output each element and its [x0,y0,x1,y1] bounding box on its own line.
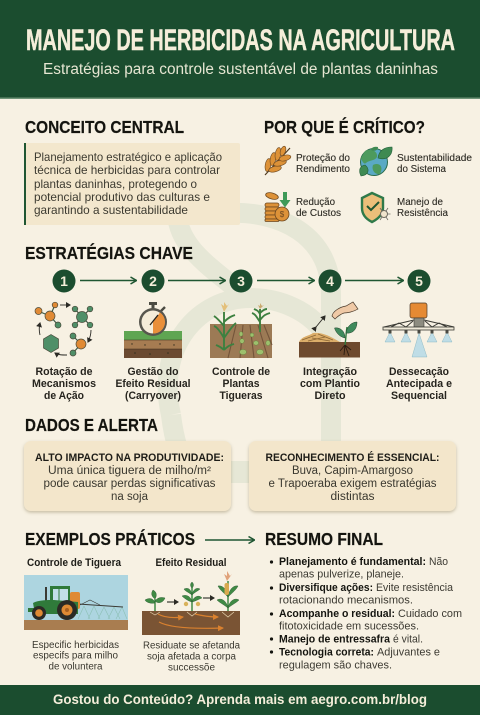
card: alto impacto: Uma única tiguera de milho/m² [48,465,211,477]
illustration: tractor spraying [24,575,128,630]
card: reconhecimento: RECONHECIMENTO É ESSENCIAL: [266,451,440,464]
panel: conceito central: técnica de herbicidas para controlar [34,163,220,177]
subtitle: Estratégias para controle sustentável de plantas daninhas [43,61,438,78]
caption: efeito residual: Residuate se afetanda [143,640,240,652]
caption: efeito residual: soja afetada a corpa [147,652,236,662]
illustration: residual effect succession [142,571,240,635]
arrow 1 to 2 [80,280,136,282]
label: manejo de resistência [397,197,448,219]
step 2 badge: 2 [149,273,157,289]
label: sustentabilidade do sistema [397,153,472,175]
label: controle de plantas tigueras: Tigueras [220,390,262,402]
step 4 badge [318,270,342,292]
label: manejo de resistência: Resistência [397,208,448,219]
list: resumo final: rotacionando mecanismos. [279,594,413,606]
list: resumo final: Acompanhe o residual: [279,608,395,620]
label: rotação de mecanismos: Mecanismos [32,378,96,390]
heading: estratégias chave: ESTRATÉGIAS CHAVE [25,242,193,263]
icon: molecule rotation [35,302,93,356]
label: redução de custos: de Custos [296,208,341,219]
label: controle de plantas tigueras [212,366,270,402]
subheading: efeito residual: Efeito Residual [156,557,226,569]
label: dessecação antecipada e sequencial: Sequencial [391,390,447,402]
caption: tiguera: de voluntera [48,662,103,672]
list: resumo final: Manejo de entressafra [279,634,391,646]
card: alto impacto: pode causar perdas significativas [44,478,216,490]
label: controle de plantas tigueras: Plantas [222,378,260,390]
heading: resumo final: RESUMO FINAL [265,529,383,549]
label: redução de custos: Redução [296,197,335,208]
label: dessecação antecipada e sequencial: Dessecação [389,366,449,378]
step 5 badge: 5 [415,273,423,289]
arrow to resumo [205,539,254,541]
list: resumo final: regulagem são chaves. [279,660,392,672]
list: resumo final: fitotoxicidade em sucessões. [279,620,419,632]
list: resumo final [270,556,462,672]
footer band [0,685,480,715]
step 2 badge [142,270,164,292]
list: resumo final: Planejamento é fundamental: [279,556,426,568]
footer band: Gostou do Conteúdo? Aprenda mais em aegro.com.br/blog [53,692,427,707]
label: integração com plantio direto: com Plantio [300,378,360,390]
icon: corn field [210,302,272,358]
icon: coins and down arrow: $ [280,210,285,219]
caption: tiguera: especifs para milho [33,650,118,662]
panel: conceito central: potencial produtivo das culturas e [34,190,210,204]
icon: stopwatch on soil [124,302,182,358]
card: reconhecimento: Buva, Capim-Amargoso [292,465,413,477]
icon: no-till plant and hand [299,302,360,358]
icon: boom sprayer [383,303,454,357]
label: manejo de resistência: Manejo de [397,197,443,208]
step 1 badge [52,270,76,292]
card: alto impacto: na soja [111,491,149,503]
label: proteção do rendimento [296,153,350,175]
panel: conceito central: plantas daninhas, protegendo o [34,177,197,191]
list: resumo final: Diversifique ações: [279,582,373,594]
label: dessecação antecipada e sequencial: Antecipada e [386,378,452,390]
label: controle de plantas tigueras: Controle de [212,366,270,378]
label: proteção do rendimento: Proteção do [296,153,350,164]
step 4 badge: 4 [326,273,334,289]
icon: coins and down arrow [265,191,290,222]
header band [0,0,480,99]
card: reconhecimento [249,441,456,511]
label: gestão do efeito residual [116,366,190,402]
label: redução de custos [296,197,341,219]
card: reconhecimento: e Trapoeraba exigem estratégias [268,478,437,490]
label: proteção do rendimento: Rendimento [296,164,350,175]
heading: conceito central: CONCEITO CENTRAL [25,117,184,137]
list: resumo final: apenas pulverize, planeje. [279,568,404,580]
label: sustentabilidade do sistema: Sustentabilidade [397,153,472,164]
list: resumo final: Adjuvantes e [377,646,440,658]
list: resumo final: Não [429,556,448,568]
panel: conceito central: Planejamento estratégico e aplicação [34,150,222,164]
arrow 3 to 4 [257,280,314,282]
icon: shield with check [362,193,390,222]
list: resumo final: é vital. [393,634,423,646]
step 3 badge: 3 [237,273,245,289]
label: dessecação antecipada e sequencial [386,366,452,402]
caption: efeito residual: successõe [168,662,215,674]
label: integração com plantio direto: Direto [314,390,346,402]
list: resumo final: Cuidado com [398,608,462,620]
heading: exemplos práticos: EXEMPLOS PRÁTICOS [25,528,195,549]
caption: tiguera: Especific herbicidas [32,640,119,651]
step 5 badge [408,270,430,292]
subheading: controle de tiguera: Controle de Tiguera [27,557,122,569]
label: integração com plantio direto [300,366,360,402]
icon: wheat [264,145,292,175]
arrow 2 to 3 [168,280,225,282]
label: sustentabilidade do sistema: do Sistema [397,164,446,175]
caption: efeito residual [143,640,240,674]
panel: conceito central: garantindo a sustentabilidade [34,203,188,217]
label: gestão do efeito residual: (Carryover) [125,390,181,402]
card: alto impacto [24,441,231,511]
heading: dados e alerta: DADOS E ALERTA [25,415,158,435]
background watermark [168,213,331,480]
card: alto impacto: ALTO IMPACTO NA PRODUTIVIDADE: [35,452,224,464]
label: rotação de mecanismos [32,366,96,402]
step 3 badge [230,270,252,292]
panel: conceito central [24,143,240,225]
list: resumo final: Evite resistência [376,582,453,594]
label: rotação de mecanismos: Rotação de [36,366,92,378]
label: gestão do efeito residual: Gestão do [128,366,179,378]
heading: por que é crítico: POR QUE É CRÍTICO? [264,116,425,137]
caption: tiguera [32,640,119,672]
card: reconhecimento: distintas [330,491,375,503]
list: resumo final: Tecnologia correta: [279,646,374,658]
icon: globe with leaves [360,147,392,176]
step 1 badge: 1 [60,273,68,289]
label: rotação de mecanismos: de Ação [44,390,84,402]
label: integração com plantio direto: Integração [303,366,357,378]
label: gestão do efeito residual: Efeito Residual [116,378,190,390]
arrow 4 to 5 [345,280,403,282]
